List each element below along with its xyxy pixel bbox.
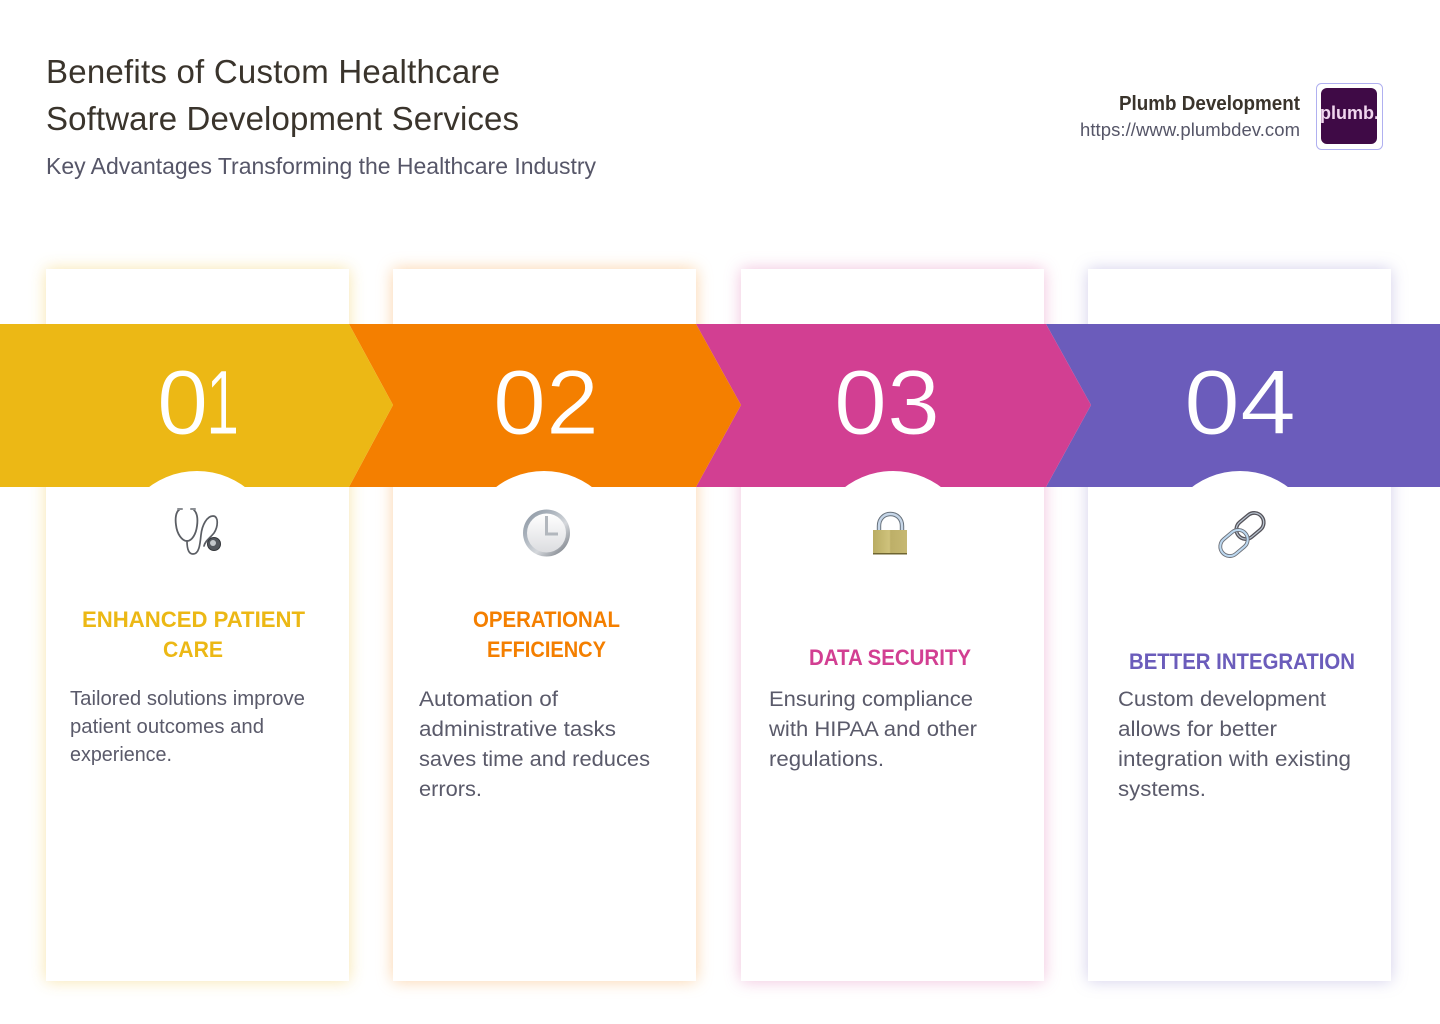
card 1 heading: ENHANCED PATIENT	[82, 607, 306, 632]
icon backdrop 4	[1160, 471, 1320, 631]
icon backdrop 3	[813, 471, 973, 631]
panel: card 1 background	[46, 269, 349, 981]
subtitle: Key Advantages Transforming the Healthcare Industry	[46, 153, 596, 179]
icon: stethoscope	[176, 509, 220, 554]
card 2 heading: EFFICIENCY	[487, 637, 606, 662]
brand name and url: Plumb Development	[1119, 93, 1300, 115]
card 1 text	[70, 687, 305, 766]
brand name and url: https://www.plumbdev.com	[1080, 119, 1300, 140]
card 4 text: systems.	[1118, 777, 1206, 801]
panel: card 2 background	[393, 269, 696, 981]
card 2 heading: OPERATIONAL	[473, 607, 620, 632]
card 1 text: patient outcomes and	[70, 715, 264, 738]
logo: plumb	[1316, 84, 1382, 150]
card 4 text	[1118, 687, 1351, 801]
card 2 text: Automation of	[419, 687, 558, 711]
card 1 heading	[82, 607, 306, 662]
card 2 heading	[473, 607, 620, 662]
card 4 text: integration with existing	[1118, 747, 1351, 771]
number 03: 03	[834, 352, 940, 454]
number 01: 1	[206, 352, 239, 454]
card 1 text: experience.	[70, 743, 172, 766]
card 2 text: saves time and reduces	[419, 747, 650, 771]
icon: clock	[523, 510, 570, 556]
logo: plumb: plumb.	[1320, 103, 1379, 123]
card 2 text: administrative tasks	[419, 717, 616, 741]
arrow banner 4	[1046, 324, 1440, 487]
number 01: 0	[157, 352, 208, 454]
arrow banner 3	[696, 324, 1091, 487]
panel: card 3 background	[741, 269, 1044, 981]
icon: padlock	[873, 514, 907, 554]
number 04: 04	[1184, 352, 1296, 454]
title: Benefits of Custom Healthcare	[46, 53, 500, 90]
card 3 text: regulations.	[769, 747, 884, 771]
card 3 text	[768, 687, 977, 771]
card 4 text: allows for better	[1118, 717, 1277, 741]
arrow banner 2	[349, 324, 741, 487]
arrow banner 1	[0, 324, 393, 487]
card 3 heading: DATA SECURITY	[809, 645, 971, 670]
card 3 text: with HIPAA and other	[768, 717, 977, 741]
card 3 text: Ensuring compliance	[769, 687, 973, 711]
panel: card 4 background	[1088, 269, 1391, 981]
icon: chain links	[1216, 509, 1268, 560]
icon backdrop 2	[464, 471, 624, 631]
brand name and url	[1080, 93, 1300, 140]
title	[46, 53, 519, 137]
card 4 text: Custom development	[1118, 687, 1326, 711]
card 1 text: Tailored solutions improve	[70, 687, 305, 710]
number 01	[157, 352, 239, 454]
number 02: 02	[493, 352, 599, 454]
card 2 text	[419, 687, 650, 801]
card 2 text: errors.	[419, 777, 482, 801]
title: Software Development Services	[46, 100, 519, 137]
icon backdrop 1	[117, 471, 277, 631]
card 4 heading: BETTER INTEGRATION	[1129, 649, 1355, 674]
card 1 heading: CARE	[163, 637, 223, 662]
